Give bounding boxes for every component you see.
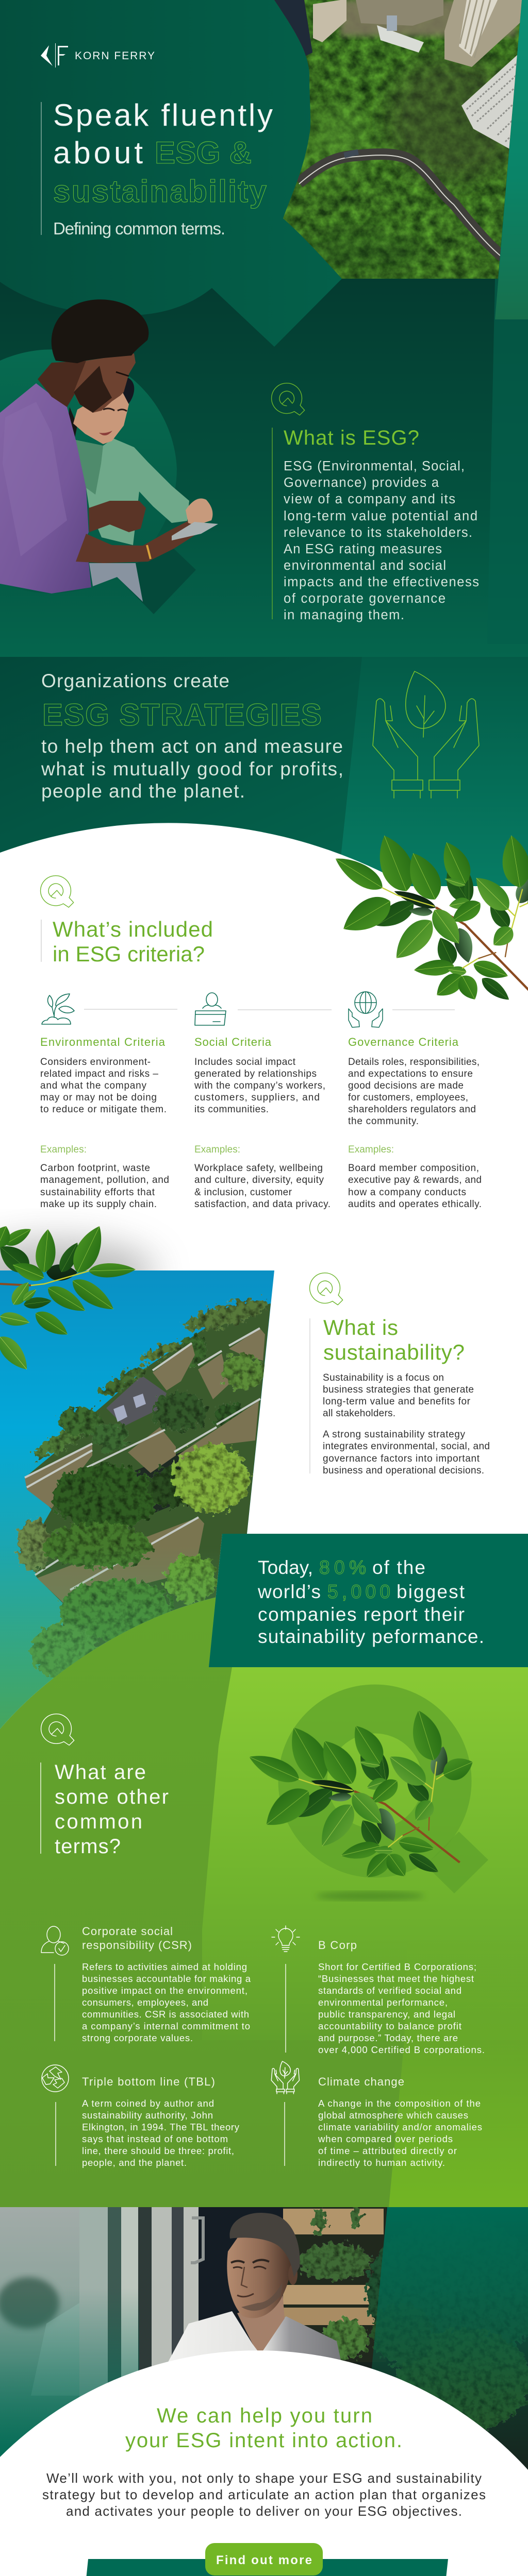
title: sustainability — [53, 174, 267, 209]
callout: 80 percent stat: companies report their — [258, 1604, 465, 1625]
logo: Korn Ferry header — [41, 43, 155, 67]
column: environmental criteria — [40, 994, 177, 1210]
text: call to action — [42, 2470, 486, 2519]
examples: sustainability efforts that — [40, 1187, 155, 1198]
examples — [40, 1144, 169, 1210]
text: generated by relationships — [194, 1069, 317, 1079]
text: shareholders regulators and — [348, 1104, 476, 1115]
text: climate variability and/or anomalies — [318, 2122, 482, 2132]
text: ESG strategies statement: what is mutually good for profits, — [41, 758, 343, 779]
text: with the company’s workers, — [194, 1080, 325, 1091]
image: leafy branch lower left — [0, 1222, 136, 1375]
text: call to action: We’ll work with you, not only to shape your ESG and sustainability — [46, 2470, 482, 2486]
text: all stakeholders. — [323, 1408, 395, 1419]
text: ESG definition: long-term value potential and — [284, 509, 477, 523]
text: call to action: and activates your people to deliver on your ESG objectives. — [66, 2503, 462, 2519]
text: says that instead of one bottom — [82, 2133, 228, 2144]
text: Refers to activities aimed at holding — [82, 1961, 247, 1972]
text: ESG definition: impacts and the effectiveness — [284, 575, 479, 589]
panel: green other-terms background — [0, 1597, 528, 2207]
text: ESG strategies statement: people and the planet. — [41, 781, 245, 802]
text: communities. CSR is associated with — [82, 2009, 249, 2020]
examples — [348, 1144, 482, 1210]
text: line, there should be three: profit, — [82, 2145, 234, 2156]
text: to reduce or mitigate them. — [40, 1104, 167, 1115]
text: ESG definition — [284, 459, 479, 622]
shadow under lower branch — [0, 1241, 155, 1304]
heading: in ESG criteria? — [53, 942, 205, 966]
text: A strong sustainability strategy — [323, 1429, 465, 1440]
text: A term coined by author and — [82, 2098, 214, 2109]
text: environmental performance, — [318, 1997, 448, 2008]
text: governance factors into important — [323, 1453, 480, 1464]
text: ESG definition: environmental and social — [284, 558, 446, 573]
text: business and operational decisions. — [323, 1465, 484, 1476]
icon: light bulb — [272, 1926, 300, 1952]
column: social criteria — [194, 993, 332, 1210]
examples: audits and operates ethically. — [348, 1199, 482, 1210]
text: ESG definition: relevance to its stakeholders. — [284, 526, 472, 540]
heading: Environmental Criteria — [40, 1036, 166, 1048]
examples: Examples: — [348, 1144, 394, 1155]
text: ESG definition: ESG (Environmental, Social, — [284, 459, 465, 473]
icon: Q — [310, 1273, 343, 1305]
heading: Climate change — [318, 2075, 404, 2088]
subtitle: Defining common terms. — [53, 219, 225, 238]
text — [318, 1961, 485, 2055]
text: ESG definition: Governance) provides a — [284, 476, 439, 490]
heading: Triple bottom line (TBL) — [82, 2075, 215, 2088]
title: ESG & — [155, 135, 252, 170]
icon: hands with leaf — [271, 2061, 299, 2094]
heading — [53, 917, 213, 966]
heading: What’s included — [53, 917, 213, 941]
heading: Social Criteria — [194, 1036, 272, 1048]
callout: 80 percent stat: biggest — [397, 1581, 465, 1602]
image: leafy branch upper right — [314, 808, 528, 1016]
panel: white ESG criteria background — [0, 823, 528, 1602]
text: a company’s internal commitment to — [82, 2021, 250, 2031]
heading: B Corp — [318, 1939, 357, 1952]
text: related impact and risks – — [40, 1069, 158, 1079]
hero photo: aerial forest with road and towers — [268, 0, 528, 281]
text: Elkington, in 1994. The TBL theory — [82, 2122, 240, 2132]
text: its communities. — [194, 1104, 269, 1115]
term: triple bottom line — [42, 2065, 240, 2168]
heading — [323, 1315, 465, 1364]
text: good decisions are made — [348, 1080, 464, 1091]
text: ESG strategies statement — [41, 670, 343, 802]
text: of time – attributed directly or — [318, 2145, 457, 2156]
examples: and culture, diversity, equity — [194, 1175, 324, 1185]
icon: person with check — [41, 1926, 69, 1955]
text: ESG definition: view of a company and its — [284, 492, 455, 506]
callout: 80 percent stat: sutainability peformance. — [258, 1626, 484, 1647]
button: find out more: Find out more — [216, 2553, 312, 2567]
panel: other common terms heading — [41, 1714, 169, 1858]
examples: Carbon footprint, waste — [40, 1163, 150, 1174]
examples: Examples: — [40, 1144, 87, 1155]
panel: what's included — [41, 876, 213, 966]
callout: 80 percent stat: world’s — [257, 1581, 321, 1602]
text: Sustainability is a focus on — [323, 1372, 444, 1383]
text: ESG strategies statement: to help them act on and measure — [41, 736, 343, 757]
heading: Governance Criteria — [348, 1036, 459, 1048]
text: public transparency, and legal — [318, 2009, 455, 2020]
heading — [55, 1761, 169, 1858]
text: ESG definition: An ESG rating measures — [284, 542, 442, 556]
text: ESG definition: of corporate governance — [284, 591, 446, 606]
text: and expectations to ensure — [348, 1069, 473, 1079]
column: governance criteria — [348, 992, 482, 1210]
icon: Q — [41, 876, 74, 907]
term: B Corp — [272, 1926, 485, 2055]
heading: call to action — [125, 2404, 402, 2452]
text: Considers environment- — [40, 1057, 151, 1067]
text: strong corporate values. — [82, 2032, 193, 2043]
text: ESG definition: in managing them. — [284, 608, 404, 622]
photo: two people looking at a tablet inside a Q shape — [0, 299, 218, 614]
text: business strategies that generate — [323, 1384, 474, 1395]
callout: 80 percent stat — [209, 1534, 528, 1667]
text: and purpose.” Today, there are — [318, 2032, 458, 2043]
text — [82, 2098, 240, 2168]
callout: 80 percent stat: 5,000 — [327, 1581, 390, 1602]
heading: call to action: We can help you turn — [157, 2404, 372, 2427]
text: ESG strategies statement: ESG STRATEGIES — [42, 698, 322, 732]
term: climate change — [271, 2061, 482, 2168]
text: global atmosphere which causes — [318, 2110, 468, 2121]
heading: common — [55, 1810, 142, 1833]
examples: Board member composition, — [348, 1163, 479, 1174]
panel: white call to action background — [0, 2350, 528, 2576]
text: long-term value and benefits for — [323, 1396, 471, 1407]
title: about — [53, 135, 143, 170]
icon: recycle — [42, 2065, 69, 2092]
text: Includes social impact — [194, 1057, 296, 1067]
text — [82, 1961, 251, 2043]
text: the community. — [348, 1116, 419, 1127]
heading: call to action: your ESG intent into action. — [125, 2429, 402, 2452]
photo: green tower against blue sky — [0, 1270, 278, 1734]
text: integrates environmental, social, and — [323, 1441, 490, 1452]
text — [194, 1057, 325, 1115]
examples: how a company conducts — [348, 1187, 466, 1198]
examples: Workplace safety, wellbeing — [194, 1163, 323, 1174]
examples: management, pollution, and — [40, 1175, 169, 1185]
text: indirectly to human activity. — [318, 2157, 445, 2168]
text: people, and the planet. — [82, 2157, 187, 2168]
text: call to action: strategy but to develop and articulate an action plan that organizes — [42, 2487, 486, 2502]
icon: plant — [42, 994, 74, 1024]
text: and what the company — [40, 1080, 146, 1091]
heading: What is ESG?: What is ESG? — [284, 427, 419, 449]
photo: man looking out of a window — [0, 2205, 528, 2480]
title — [53, 98, 273, 209]
examples: executive pay & rewards, and — [348, 1175, 482, 1185]
icon: Q — [41, 1714, 74, 1745]
term: corporate social responsibility — [41, 1925, 251, 2043]
vertical rule: title — [41, 102, 42, 235]
panel: ESG strategies background — [0, 657, 528, 886]
panel: hero background — [0, 0, 528, 657]
examples: & inclusion, customer — [194, 1187, 292, 1198]
examples — [194, 1144, 331, 1210]
icon: hands holding a leaf — [373, 671, 479, 798]
panel: what is ESG — [272, 383, 479, 622]
title: Speak fluently — [53, 98, 273, 132]
heading: responsibility (CSR) — [82, 1939, 192, 1952]
image: big Q with branch — [245, 1706, 488, 1901]
heading: Corporate social — [82, 1925, 173, 1938]
text: standards of verified social and — [318, 1985, 461, 1996]
icon: person at desk — [195, 993, 226, 1025]
heading: terms? — [55, 1835, 121, 1858]
text: Details roles, responsibilities, — [348, 1057, 480, 1067]
text: businesses accountable for making a — [82, 1973, 251, 1984]
text — [323, 1372, 490, 1476]
text — [348, 1057, 480, 1127]
text — [40, 1057, 167, 1115]
text: when compared over periods — [318, 2133, 453, 2144]
text: ESG strategies statement: Organizations create — [41, 670, 229, 691]
examples: Examples: — [194, 1144, 240, 1155]
text: accountability to balance profit — [318, 2021, 461, 2031]
button: find out more — [205, 2543, 323, 2575]
text: positive impact on the environment, — [82, 1985, 248, 1996]
text: A change in the composition of the — [318, 2098, 481, 2109]
text: may or may not be doing — [40, 1092, 157, 1103]
heading: some other — [55, 1786, 169, 1808]
panel: what is sustainability — [310, 1273, 490, 1476]
text: Short for Certified B Corporations; — [318, 1961, 476, 1972]
text: consumers, employees, and — [82, 1997, 208, 2008]
examples: make up its supply chain. — [40, 1199, 157, 1210]
text — [318, 2098, 482, 2168]
heading: What is — [323, 1315, 398, 1340]
callout: 80 percent stat: Today, — [258, 1557, 313, 1578]
text: over 4,000 Certified B corporations. — [318, 2044, 485, 2055]
text: “Businesses that meet the highest — [318, 1973, 474, 1984]
callout: 80 percent stat: 80% — [319, 1557, 366, 1578]
examples: satisfaction, and data privacy. — [194, 1199, 331, 1210]
text: sustainability authority, John — [82, 2110, 213, 2121]
icon: globe in hands — [349, 992, 383, 1027]
panel: learn more box — [80, 2559, 448, 2576]
heading — [82, 1925, 192, 1952]
icon: Q — [272, 383, 305, 415]
text: for customers, employees, — [348, 1092, 468, 1103]
text: customers, suppliers, and — [194, 1092, 320, 1103]
heading: What are — [55, 1761, 146, 1784]
logo: Korn Ferry header: KORN FERRY — [75, 50, 155, 62]
callout: 80 percent stat: of the — [372, 1557, 425, 1578]
heading: sustainability? — [323, 1340, 465, 1364]
